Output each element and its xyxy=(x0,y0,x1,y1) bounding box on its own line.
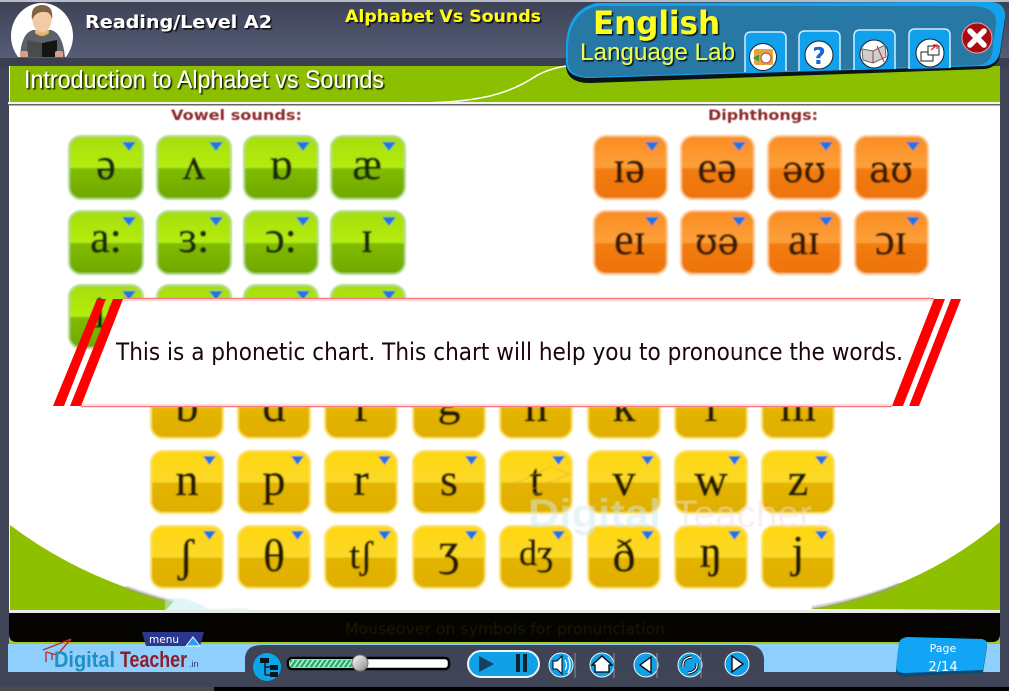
consonants chart: n xyxy=(176,454,198,505)
logo: Digital Teacher xyxy=(43,639,199,672)
watermark: Digital Teacher: Digital xyxy=(528,492,661,536)
title bar xyxy=(8,66,1000,106)
logo: Digital Teacher: Teacher xyxy=(120,647,187,672)
menu tab xyxy=(142,632,204,646)
consonants chart: dʒ xyxy=(519,533,553,573)
diphthongs chart: aɪ xyxy=(788,215,820,264)
consonants chart: v xyxy=(612,454,636,505)
icon: close button xyxy=(962,23,992,53)
consonants chart: r xyxy=(353,454,369,505)
diphthongs chart: ɪə xyxy=(613,143,645,192)
consonants chart xyxy=(151,374,834,588)
diphthongs chart: ʊə xyxy=(695,222,739,263)
consonants chart: f xyxy=(353,380,369,431)
diphthongs chart: eə xyxy=(697,143,737,192)
watermark: Digital Teacher: .in xyxy=(814,514,829,530)
diphthongs chart xyxy=(594,136,928,274)
consonants chart: s xyxy=(440,454,458,505)
diphthongs chart: ɔɪ xyxy=(875,215,907,264)
content area xyxy=(9,66,1000,613)
icon: help tab xyxy=(799,31,840,71)
left red stripes xyxy=(53,299,123,406)
heading: vowel sounds: Vowel sounds: xyxy=(171,108,302,124)
consonants chart: p xyxy=(262,454,286,505)
watermark: Digital Teacher: Teacher xyxy=(674,494,812,536)
consonants chart: ʒ xyxy=(439,524,459,575)
right red stripes xyxy=(892,299,961,406)
consonants chart: t xyxy=(530,454,543,505)
callout text: This is a phonetic chart. This chart will help you to pronounce the words. xyxy=(115,338,903,366)
slide title: Introduction to Alphabet vs Sounds xyxy=(24,66,384,94)
icon: history tab xyxy=(745,32,786,72)
icon: next xyxy=(725,652,749,676)
play and pause buttons xyxy=(468,651,539,677)
vowel sounds chart: a: xyxy=(90,213,122,262)
consonants chart: ð xyxy=(612,530,636,581)
diphthongs chart: aʊ xyxy=(869,150,913,191)
icon: help tab: ? xyxy=(812,44,826,70)
consonants chart: tʃ xyxy=(349,535,374,577)
panel: English Language Lab header xyxy=(566,2,1005,83)
vowel sounds chart xyxy=(69,136,405,348)
instruction bar xyxy=(9,613,1000,645)
icon: window tab xyxy=(909,29,950,69)
icon: sound xyxy=(549,653,573,677)
callout banner xyxy=(53,298,961,406)
consonants chart: l xyxy=(705,380,717,431)
vowel sounds chart: ʌ xyxy=(183,140,205,189)
heading: reading level: Reading/Level A2 xyxy=(85,12,272,33)
logo: Digital Teacher: .in xyxy=(189,659,199,669)
vowel sounds chart: ə xyxy=(96,140,116,189)
footer strip xyxy=(8,644,1000,672)
consonants chart: z xyxy=(788,454,808,505)
instruction text: Mouseover on symbols for pronunciation xyxy=(345,620,665,638)
heading: lesson name: Alphabet Vs Sounds xyxy=(345,7,541,27)
consonants chart: ŋ xyxy=(700,526,722,577)
consonants chart: m xyxy=(780,380,816,431)
logo text: Language Lab: Language Lab xyxy=(580,39,735,66)
vowel sounds chart: ɒ xyxy=(269,140,293,189)
consonants chart: ʃ xyxy=(177,530,195,581)
progress slider xyxy=(288,655,449,671)
vowel sounds chart: i: xyxy=(94,288,118,337)
consonants chart: j xyxy=(790,526,804,577)
vowel sounds chart: ɔ: xyxy=(265,213,297,262)
diphthongs chart: əʊ xyxy=(782,150,826,191)
icon: reading student avatar xyxy=(11,3,73,57)
consonants chart: g xyxy=(438,374,460,425)
menu tab: menu xyxy=(149,634,179,646)
icon: replay xyxy=(678,653,702,677)
consonants chart: d xyxy=(262,380,286,431)
consonants chart: w xyxy=(694,454,728,505)
logo: Digital Teacher: Digital xyxy=(54,647,115,672)
consonants chart: h xyxy=(524,380,548,431)
icon: home xyxy=(590,653,614,677)
vowel sounds chart: ɪ xyxy=(361,213,373,262)
heading: diphthongs: Diphthongs: xyxy=(708,108,818,124)
icon: book tab xyxy=(854,30,895,70)
page indicator: Page xyxy=(930,642,957,655)
vowel sounds chart: ɜ: xyxy=(179,213,209,262)
page indicator: 2/14 xyxy=(928,660,958,675)
page indicator xyxy=(896,637,987,676)
consonants chart: k xyxy=(612,380,636,431)
icon: tree menu xyxy=(253,653,281,681)
consonants chart: θ xyxy=(263,530,285,581)
watermark: Digital Teacher xyxy=(508,467,829,536)
vowel sounds chart: æ xyxy=(352,140,382,189)
icon: previous xyxy=(634,653,658,677)
diphthongs chart: eɪ xyxy=(614,215,646,264)
logo text: English: English xyxy=(593,4,720,42)
consonants chart: b xyxy=(176,380,198,431)
control panel xyxy=(245,645,764,681)
